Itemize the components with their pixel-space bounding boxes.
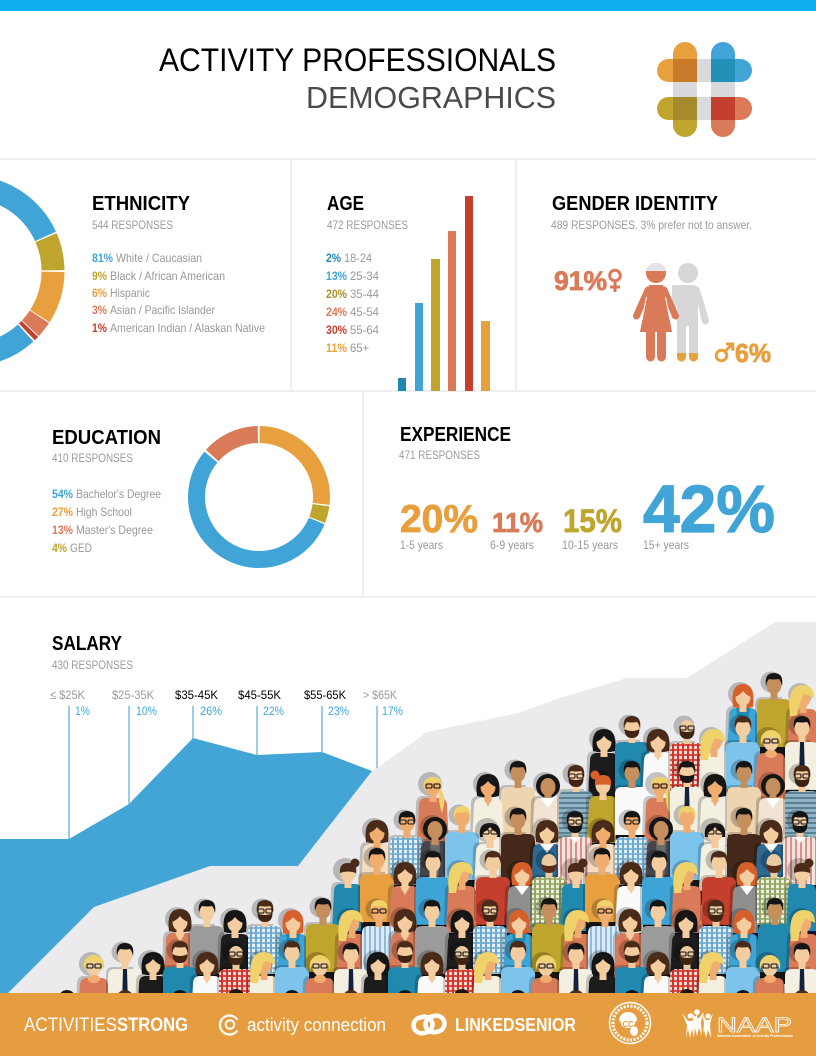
area chart: salary: $25-35K bbox=[112, 688, 154, 702]
icon: male figure bbox=[672, 263, 709, 362]
stat: 15+ years: 15+ years bbox=[643, 538, 689, 552]
panel: gender identity: 489 RESPONSES. 3% prefer not to answer. bbox=[551, 218, 752, 232]
legend: education bbox=[52, 487, 161, 555]
legend: education: 13% bbox=[52, 523, 73, 537]
legend: education: 27% bbox=[52, 505, 73, 519]
logo: activities strong: ACTIVITIES bbox=[24, 1015, 117, 1036]
icon: hash logo bbox=[657, 42, 752, 137]
stat: male 6%: 6% bbox=[735, 338, 771, 368]
area chart: salary: 26% bbox=[200, 704, 222, 718]
panel: ethnicity: ETHNICITY bbox=[92, 193, 191, 215]
legend: ethnicity: 6% bbox=[92, 286, 107, 300]
panel: ethnicity bbox=[0, 152, 265, 390]
panel: gender identity: GENDER IDENTITY bbox=[552, 193, 719, 215]
area chart: salary: 22% bbox=[263, 704, 284, 718]
title: ACTIVITY PROFESSIONALS bbox=[159, 42, 556, 78]
legend: age: 45-54 bbox=[350, 305, 379, 319]
legend: education: Master's Degree bbox=[76, 523, 153, 537]
panel: salary bbox=[0, 622, 816, 993]
stat: male 6% bbox=[716, 338, 771, 368]
legend: age: 25-34 bbox=[350, 269, 379, 283]
logo: linkedsenior bbox=[412, 1014, 576, 1035]
bar chart: age bbox=[398, 196, 490, 391]
legend: ethnicity: 81% bbox=[92, 251, 113, 265]
legend: ethnicity: 9% bbox=[92, 269, 107, 283]
logo: activity connection bbox=[216, 1012, 386, 1038]
footer band bbox=[0, 993, 816, 1056]
title: DEMOGRAPHICS bbox=[306, 80, 556, 115]
stat: 10-15 years: 15% bbox=[563, 503, 622, 539]
logo: accap seal: ACCAP bbox=[617, 1020, 645, 1029]
legend: age: 24% bbox=[326, 305, 347, 319]
legend: age: 30% bbox=[326, 323, 347, 337]
legend: ethnicity: Black / African American bbox=[110, 269, 225, 283]
top bar bbox=[0, 0, 816, 11]
area chart: salary: $55-65K bbox=[304, 688, 346, 702]
panel: age bbox=[326, 193, 490, 391]
area chart: salary: ≤ $25K bbox=[50, 688, 85, 702]
logo: naap: National Association of Activity Professionals bbox=[717, 1033, 794, 1038]
panel: education bbox=[52, 409, 347, 585]
legend: age: 20% bbox=[326, 287, 347, 301]
logo: activity connection: activity connection bbox=[247, 1015, 386, 1035]
area chart: salary: 10% bbox=[136, 704, 157, 718]
logo: accap seal bbox=[610, 1002, 650, 1044]
legend: education: 54% bbox=[52, 487, 73, 501]
donut chart: education bbox=[171, 409, 347, 585]
panel: education: 410 RESPONSES bbox=[52, 451, 133, 465]
legend: ethnicity: 1% bbox=[92, 321, 107, 335]
logo: activities strong bbox=[24, 1015, 188, 1036]
stat: female 91%: 91% bbox=[554, 266, 607, 296]
panel: ethnicity: 544 RESPONSES bbox=[92, 218, 173, 232]
stat: 10-15 years bbox=[562, 503, 622, 552]
area chart: salary: 17% bbox=[382, 704, 403, 718]
legend: ethnicity bbox=[92, 251, 265, 335]
panel: experience: 471 RESPONSES bbox=[399, 448, 480, 462]
panel: salary: 430 RESPONSES bbox=[52, 658, 133, 672]
area chart: salary: 23% bbox=[328, 704, 349, 718]
logo: linkedsenior: LINKEDSENIOR bbox=[455, 1014, 576, 1035]
stat: 6-9 years: 6-9 years bbox=[490, 538, 534, 552]
legend: ethnicity: 3% bbox=[92, 303, 107, 317]
title bbox=[159, 42, 556, 115]
area chart: salary bbox=[0, 688, 403, 993]
crowd illustration bbox=[58, 672, 816, 1039]
panel: experience bbox=[399, 424, 775, 552]
legend: ethnicity: Hispanic bbox=[110, 286, 150, 300]
logo: naap: NAAP bbox=[717, 1014, 792, 1037]
legend: age: 65+ bbox=[350, 341, 369, 355]
panel: age: AGE bbox=[327, 193, 364, 215]
stat: 1-5 years: 20% bbox=[400, 498, 478, 541]
area chart: salary: > $65K bbox=[363, 688, 397, 702]
background hill bbox=[8, 622, 816, 993]
legend: ethnicity: White / Caucasian bbox=[116, 251, 202, 265]
panel: education: EDUCATION bbox=[52, 427, 161, 449]
logo: activities strong: STRONG bbox=[117, 1015, 188, 1036]
stat: 15+ years: 42% bbox=[643, 472, 775, 547]
panel: experience: EXPERIENCE bbox=[400, 424, 511, 446]
icon: female figure bbox=[636, 263, 676, 362]
legend: education: Bachelor's Degree bbox=[76, 487, 161, 501]
donut chart: ethnicity bbox=[0, 152, 88, 390]
legend: ethnicity: Asian / Pacific Islander bbox=[110, 303, 215, 317]
panel: gender identity bbox=[551, 193, 771, 368]
stat: 6-9 years: 11% bbox=[492, 507, 543, 538]
stat: 10-15 years: 10-15 years bbox=[562, 538, 618, 552]
legend: age: 2% bbox=[326, 251, 341, 265]
legend: education: GED bbox=[70, 541, 92, 555]
legend: ethnicity: American Indian / Alaskan Native bbox=[110, 321, 265, 335]
logo: naap bbox=[682, 1009, 794, 1038]
panel: age: 472 RESPONSES bbox=[327, 218, 408, 232]
legend: education: 4% bbox=[52, 541, 67, 555]
area chart: salary: $45-55K bbox=[238, 688, 281, 702]
legend: age bbox=[326, 251, 379, 355]
legend: age: 35-44 bbox=[350, 287, 379, 301]
legend: age: 13% bbox=[326, 269, 347, 283]
stat: 6-9 years bbox=[490, 507, 543, 552]
legend: age: 11% bbox=[326, 341, 347, 355]
area chart: salary: 1% bbox=[75, 704, 90, 718]
panel: salary: SALARY bbox=[52, 633, 123, 655]
stat: 1-5 years: 1-5 years bbox=[400, 538, 443, 552]
legend: age: 18-24 bbox=[344, 251, 372, 265]
legend: education: High School bbox=[76, 505, 132, 519]
legend: age: 55-64 bbox=[350, 323, 379, 337]
area chart: salary: $35-45K bbox=[175, 688, 218, 702]
